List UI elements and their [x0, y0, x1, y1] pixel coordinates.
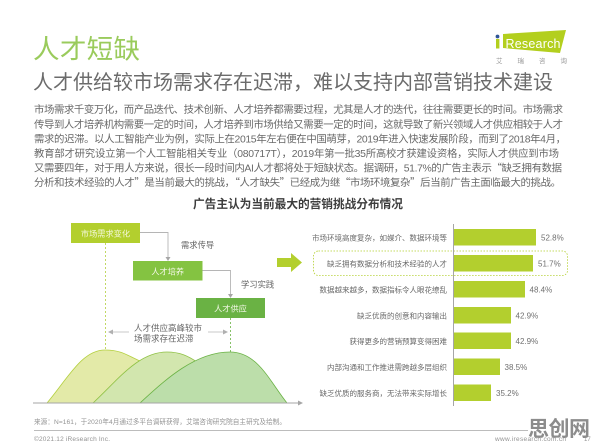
- arrow: demand to training: [140, 232, 170, 261]
- bar row 5: [350, 332, 538, 349]
- footer rule: [34, 430, 528, 432]
- lag label: 人才供应高峰较市: [134, 323, 203, 333]
- bar row 2: 51.7%: [538, 260, 561, 268]
- bar row 4: [357, 307, 538, 324]
- body text: 分析和技术经验的人才”是当前最大的挑战，“人才缺失”已经成为继“市场环境复杂”后当前广告主面临最大的挑战。: [34, 174, 561, 189]
- bar row 3: 48.4%: [530, 286, 552, 294]
- bar row 2: 缺乏拥有数据分析和技术经验的人才: [327, 258, 447, 268]
- baseline arrow: [33, 400, 303, 406]
- bar row 1: [312, 229, 564, 246]
- bar row 5: 获得更多的营销预算变得困难: [350, 336, 447, 346]
- logo: iResearch: 艾 瑞 咨 询: [496, 56, 568, 65]
- watermark: 思创网: [528, 418, 590, 441]
- bar row 6: 38.5%: [504, 363, 527, 372]
- bar row 1: 市场环境高度复杂，如媒介、数据环境等: [312, 232, 447, 242]
- lag arrow left: [108, 330, 129, 334]
- box: talent supply: 人才供应: [214, 304, 247, 314]
- subtitle: 人才供给较市场需求存在迟滞，难以支持内部营销技术建设: [33, 71, 553, 94]
- bar row 4: 缺乏优质的创意和内容输出: [357, 310, 447, 320]
- bar row 2: [327, 255, 561, 272]
- label: learning practice: 学习实践: [241, 280, 274, 290]
- icon: green arrow: [277, 253, 302, 272]
- body text: 又需要四年，对于用人方来说，很长一段时间内AI人才都将处于短缺状态。据调研，51.7%的广告主表示“缺乏拥有数据: [34, 160, 562, 174]
- box: talent training: 人才培养: [151, 266, 184, 276]
- body text: 市场需求千变万化，而产品迭代、技术创新、人才培养都需要过程，尤其是人才的迭代，往往需要更长的时间。市场需求: [34, 103, 564, 116]
- copyright: ©2021.12 iResearch Inc.: [34, 435, 110, 443]
- box: talent training: [133, 261, 202, 280]
- arrow: training to supply: [202, 270, 233, 298]
- highlight dashed box: [314, 251, 568, 276]
- body text: 传导到人才培养机构需要一定的时间，人才培养到市场供给又需要一定的时间，这就导致了新兴领域人才供应相较于人才: [34, 118, 563, 131]
- bar row 5: 42.9%: [516, 337, 538, 346]
- bar row 4: 42.9%: [516, 312, 538, 320]
- lag label: 场需求存在迟滞: [134, 334, 194, 344]
- bar row 3: 数据越来越多，数据指标令人眼花缭乱: [320, 284, 447, 294]
- bar row 7: 缺乏优质的服务商，无法带来实际增长: [320, 388, 447, 398]
- body text: [34, 103, 566, 189]
- bar row 6: [327, 358, 527, 375]
- website: www.iresearch.com.cn: [494, 436, 566, 443]
- bar row 6: 内部沟通和工作推进需跨越多层组织: [327, 362, 447, 372]
- title: 人才短缺: [33, 34, 140, 64]
- source note: 来源：N=161，于2020年4月通过多平台调研获得，艾瑞咨询研究院自主研究及绘制。: [34, 417, 286, 426]
- bar row 3: [320, 281, 552, 298]
- hill curves: [47, 350, 287, 403]
- bar row 7: 35.2%: [496, 389, 519, 398]
- box: market demand change: 市场需求变化: [81, 228, 130, 238]
- label: demand transmission: 需求传导: [181, 240, 214, 250]
- logo: iResearch: [496, 30, 568, 65]
- axis: [452, 224, 454, 406]
- page number: 17: [584, 437, 591, 443]
- dashed guides: [106, 243, 230, 352]
- flow diagram and lag curves: [33, 223, 303, 406]
- chart heading: 广告主认为当前最大的营销挑战分布情况: [193, 197, 403, 211]
- bar chart: [312, 224, 564, 406]
- logo: iResearch: Research: [506, 37, 561, 51]
- bar row 7: [320, 384, 519, 401]
- lag arrow right: [208, 330, 228, 334]
- box: talent supply: [196, 298, 265, 318]
- bar row 1: 52.8%: [541, 234, 564, 242]
- box: market demand change: [71, 223, 140, 243]
- lag label: [134, 323, 203, 344]
- body text: 教育部才研究设立第一个人工智能相关专业（080717T），2019年第一批35所高校才获建设资格，实际人才供应到市场: [34, 147, 559, 160]
- body text: 需求的迟滞。以人工智能产业为例，实际上在2015年左右便在中国萌芽，2019年进入快速发展阶段，而到了2018年4月，: [34, 132, 566, 146]
